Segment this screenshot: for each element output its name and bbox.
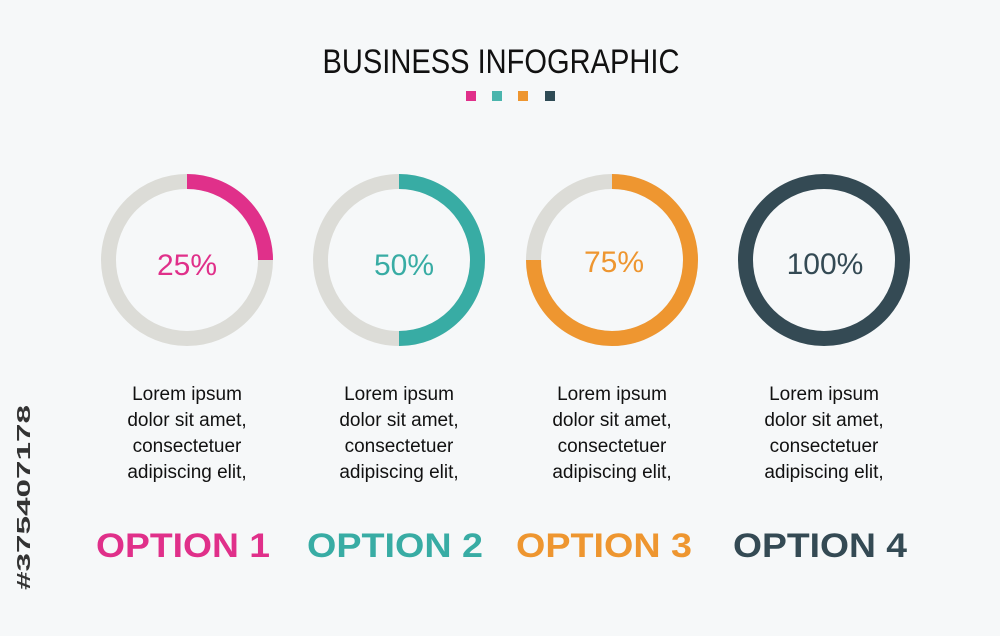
side id text: #375407178 [14, 405, 34, 590]
text blocks: dolor sit amet, [552, 410, 672, 431]
ring: 50% [320, 182, 478, 338]
text blocks: consectetuer [345, 436, 454, 457]
text blocks: Lorem ipsum [344, 384, 454, 405]
option labels: OPTION 2 [307, 527, 483, 565]
text blocks: adipiscing elit, [764, 462, 884, 483]
ring: 100%: 100% [787, 248, 863, 281]
option labels [96, 527, 907, 565]
text blocks: adipiscing elit, [339, 462, 459, 483]
ring: 25% [108, 182, 266, 338]
ring: 25%: 25% [157, 249, 217, 282]
text blocks: adipiscing elit, [552, 462, 672, 483]
text blocks: Lorem ipsum [769, 384, 879, 405]
text blocks: Lorem ipsum [557, 384, 667, 405]
title: BUSINESS INFOGRAPHIC [322, 43, 680, 81]
ring: 75%: 75% [584, 246, 644, 279]
ring: 100% [746, 182, 902, 338]
text blocks: Lorem ipsum [132, 384, 242, 405]
text blocks [127, 384, 884, 483]
text blocks: dolor sit amet, [127, 410, 247, 431]
text blocks: dolor sit amet, [764, 410, 884, 431]
text blocks: consectetuer [558, 436, 667, 457]
text blocks: consectetuer [133, 436, 242, 457]
option labels: OPTION 3 [516, 527, 692, 565]
color squares [466, 91, 555, 101]
option labels: OPTION 1 [96, 527, 270, 565]
text blocks: adipiscing elit, [127, 462, 247, 483]
ring: 50%: 50% [374, 249, 434, 282]
text blocks: consectetuer [770, 436, 879, 457]
option labels: OPTION 4 [733, 527, 907, 565]
text blocks: dolor sit amet, [339, 410, 459, 431]
ring: 75% [534, 182, 691, 338]
